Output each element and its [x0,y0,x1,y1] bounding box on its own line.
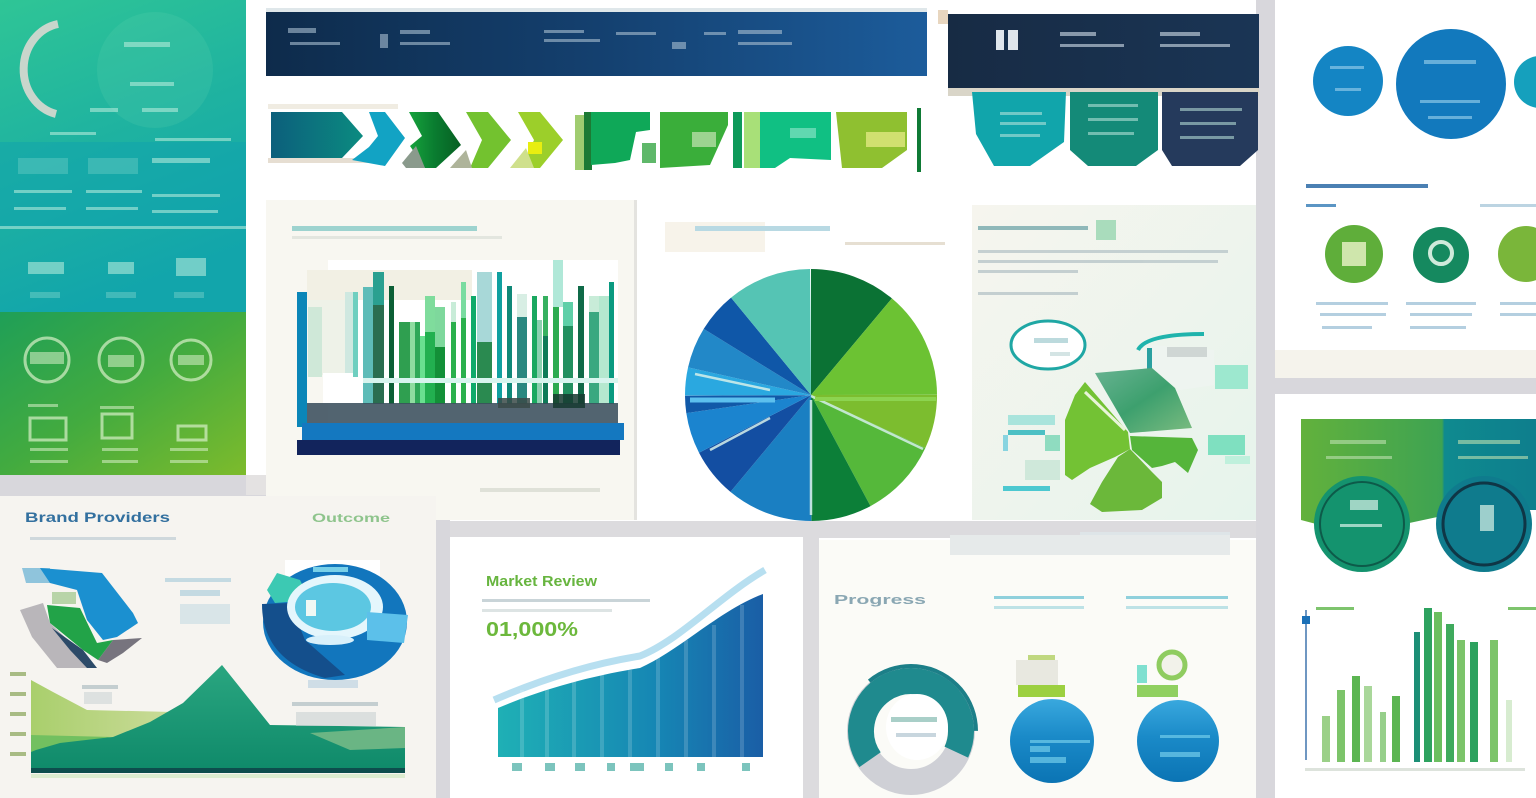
chart heading line [292,226,477,231]
panel: teal and green summary column [0,0,246,475]
small pie [1065,368,1198,512]
heading: Market Review [486,573,597,590]
icon: blue circle small [1313,46,1383,116]
annotation lines [82,685,378,726]
tile 3 [733,112,831,168]
panel: green-teal header and bars [1275,394,1536,798]
donut [819,639,1003,798]
card: navy [1162,92,1258,166]
icon: dark teal circle [1436,476,1532,572]
panel: donut and blue circles [819,535,1256,798]
icon: radial swirl [262,560,408,688]
area chart [31,665,405,778]
panel: landscape and radial graphic [0,496,436,798]
icon: isometric slab [20,568,142,668]
chart base band [297,394,624,455]
panel: landscape and radial graphic: Outcome [312,511,390,525]
bars [1322,608,1512,762]
arrow row [268,104,921,172]
panel: top dark banner [266,8,927,76]
text lines: upper teal panel [0,42,246,298]
arrow 2 [352,112,405,166]
panel: bar chart [266,200,637,520]
chart header lines [1316,607,1354,610]
arrow 1 [271,112,363,158]
area [498,594,763,757]
arrow 3 [409,112,461,168]
text lines: green panel [28,352,208,463]
icon: green circle [1314,476,1410,572]
arrow 4 [466,112,511,168]
card: green teal [1070,92,1158,166]
big number: 01,000% [486,619,578,641]
callout tags [1003,365,1250,491]
panel: blue circles and green icons, top right [1275,0,1536,378]
icons: green panel rings [25,338,211,440]
icon: blue circle 1 [1010,699,1094,783]
panel: pie chart [640,200,960,520]
heading line [1306,184,1428,188]
icon: badge [996,30,1018,50]
pie slice highlights [695,374,923,515]
panel: small pie and callouts [972,205,1256,554]
icon: lime box 1 [1016,655,1065,697]
arrow 5 [518,112,563,168]
icon: green badge 1 [1325,225,1383,283]
icon: blue circle 2 [1137,700,1219,782]
panel: header cards, top right [938,10,1259,166]
icon: green badge 3 [1498,226,1536,282]
callout: right arc [1138,334,1214,390]
small text block [165,578,231,624]
card: teal [972,92,1066,166]
heading: Progress [834,592,926,607]
tile 4 [836,112,907,168]
icon: lime ring 2 [1137,652,1185,697]
icon: gauge arc [24,24,58,114]
axis labels [512,763,750,771]
pie [748,332,874,458]
icon: blue circle large [1396,29,1506,139]
tile 1 [575,112,656,170]
icon: green badge 2 [1413,227,1469,283]
axis [1305,610,1307,760]
panel: growth area chart [450,537,803,798]
bars [297,260,614,427]
tile 2 [660,112,728,168]
heading: Brand Providers [25,509,170,525]
callout: left ring [1011,321,1085,369]
